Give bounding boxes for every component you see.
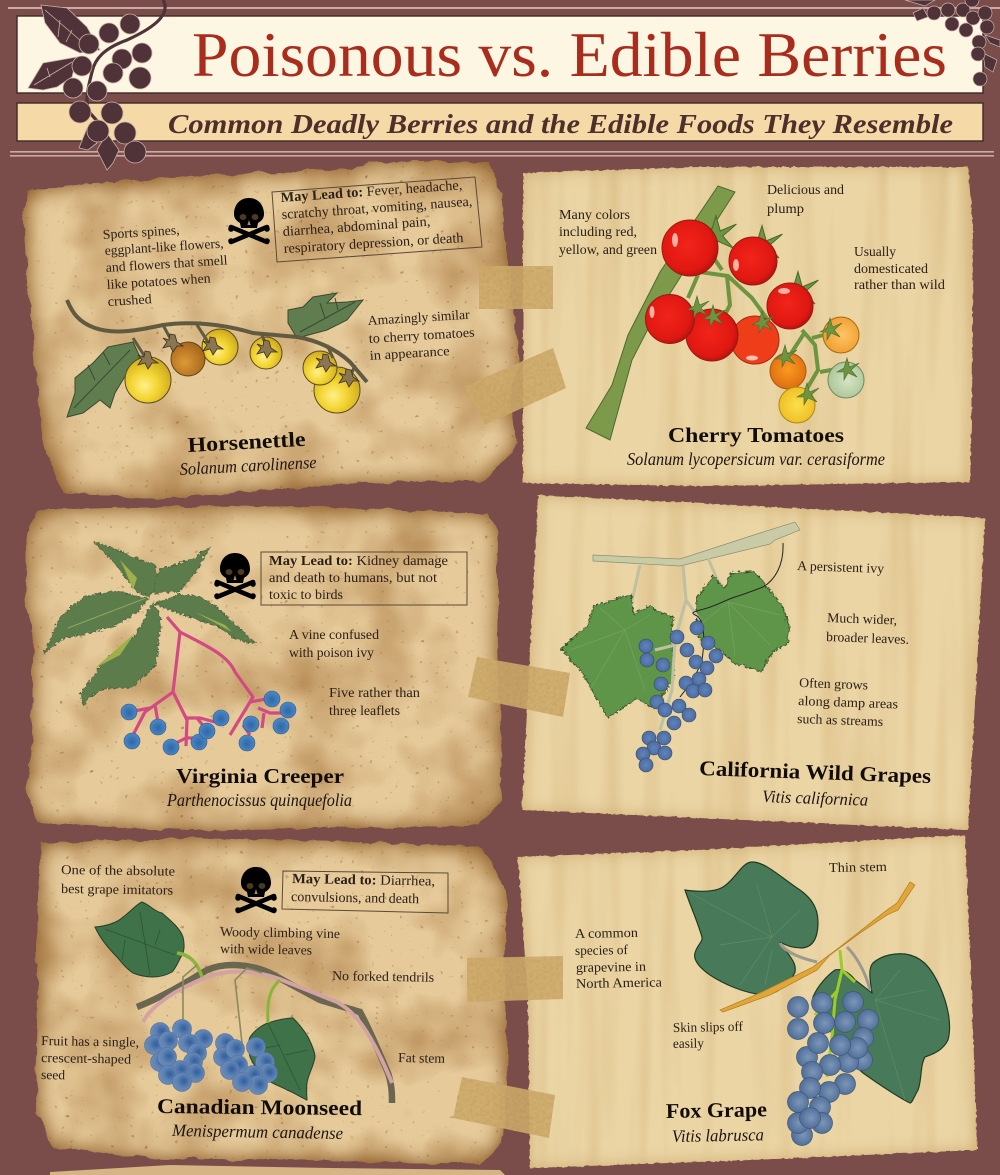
- note: colors: yellow, and green: [559, 242, 657, 257]
- note: woody vine: Woody climbing vine: [220, 924, 340, 941]
- note: delicious: Delicious and: [767, 182, 844, 197]
- name: California Wild Grapes: [699, 756, 932, 810]
- illustration: virginia creeper: [43, 541, 296, 755]
- note: damp areas: along damp areas: [798, 693, 898, 711]
- note: seed: crescent-shaped: [41, 1050, 131, 1067]
- name: Canadian Moonseed: Menispermum canadense: [171, 1120, 343, 1143]
- note: vine confused: with poison ivy: [289, 645, 374, 660]
- note: damp areas: such as streams: [797, 711, 883, 729]
- name: Fox Grape: Fox Grape: [666, 1097, 767, 1123]
- illustration: california wild grape: [560, 522, 800, 772]
- icon: berry vine top right: [905, 0, 1000, 86]
- illustration: moonseed: [95, 902, 392, 1103]
- name: Cherry Tomatoes: Cherry Tomatoes: [668, 423, 844, 447]
- name: California Wild Grapes: Vitis californica: [762, 786, 869, 810]
- next panel edge: [50, 1165, 505, 1175]
- illustration: fox grape: [685, 862, 950, 1146]
- note: domesticated: rather than wild: [854, 277, 945, 292]
- note: colors: Many colors: [559, 207, 630, 222]
- warning box: convulsions, and death: [291, 890, 419, 907]
- note: spines: crushed: [107, 291, 152, 309]
- name: Fox Grape: Vitis labrusca: [672, 1124, 764, 1146]
- panel: Cherry Tomatoes: [523, 167, 973, 486]
- warning box: scratchy throat, vomiting, nausea,: [281, 195, 473, 223]
- warning box: May Lead to: Diarrhea,: [292, 872, 435, 889]
- icon: skull and crossbones: [235, 867, 277, 913]
- note: leaves: broader leaves.: [826, 629, 909, 647]
- name: Cherry Tomatoes: [627, 423, 885, 469]
- name: Canadian Moonseed: Canadian Moonseed: [157, 1094, 363, 1120]
- note: woody vine: [220, 924, 340, 958]
- panel: Fox Grape: [518, 835, 977, 1168]
- note: ivy: A persistent ivy: [797, 558, 885, 576]
- note: spines: and flowers that smell: [105, 252, 228, 275]
- note: grape imitators: [61, 862, 175, 898]
- note: leaflets: [329, 685, 420, 718]
- note: grape imitators: best grape imitators: [61, 881, 173, 898]
- warning box: [282, 871, 448, 913]
- warning box: [261, 552, 467, 605]
- name: Cherry Tomatoes: Solanum lycopersicum var. cerasiforme: [627, 449, 885, 469]
- title banner: Poisonous vs. Edible Berries: [192, 20, 947, 90]
- note: domesticated: [854, 244, 945, 292]
- panel: Canadian Moonseed: [36, 838, 508, 1165]
- name: Canadian Moonseed: [157, 1094, 363, 1143]
- note: domesticated: domesticated: [854, 261, 928, 276]
- note: similar to tomatoes: Amazingly similar: [367, 307, 470, 328]
- header: [8, 0, 1000, 170]
- warning box: respiratory depression, or death: [283, 231, 464, 257]
- name: Virginia Creeper: Parthenocissus quinquefolia: [166, 790, 352, 810]
- name: California Wild Grapes: California Wild Grapes: [699, 756, 932, 788]
- name: Horsenettle: Horsenettle: [187, 427, 306, 457]
- icon: skull and crossbones: [214, 553, 256, 599]
- note: common species: grapevine in: [576, 959, 646, 975]
- panel: Horsenettle: [23, 162, 518, 498]
- note: leaflets: three leaflets: [329, 703, 400, 718]
- note: seed: [41, 1033, 139, 1082]
- note: leaves: [826, 610, 909, 647]
- note: skin slips: Skin slips off: [673, 1019, 744, 1035]
- illustration: horsenettle branch: [67, 293, 367, 417]
- warning box: and death to humans, but not: [269, 571, 437, 586]
- note: leaves: Much wider,: [827, 610, 897, 627]
- note: similar to tomatoes: to cherry tomatoes: [368, 325, 475, 346]
- note: seed: Fruit has a single,: [41, 1033, 139, 1050]
- subtitle banner: Common Deadly Berries and the Edible Foods They Resemble: [168, 109, 953, 139]
- note: damp areas: [797, 675, 898, 729]
- note: tendrils: No forked tendrils: [332, 968, 434, 985]
- note: common species: North America: [576, 975, 662, 991]
- note: thin stem: Thin stem: [829, 859, 888, 875]
- tape strips: [453, 266, 570, 1138]
- name: Virginia Creeper: Virginia Creeper: [176, 764, 344, 788]
- note: delicious: [767, 182, 844, 216]
- icon: berry vine top left: [28, 0, 165, 170]
- note: vine confused: A vine confused: [289, 627, 379, 642]
- note: similar to tomatoes: in appearance: [369, 343, 450, 363]
- note: colors: including red,: [559, 224, 637, 239]
- note: delicious: plump: [767, 201, 804, 216]
- note: damp areas: Often grows: [799, 675, 868, 692]
- note: spines: eggplant-like flowers,: [104, 236, 224, 258]
- note: skin slips: [673, 1019, 744, 1051]
- note: grape imitators: One of the absolute: [61, 862, 175, 879]
- panel: Virginia Creeper: [26, 506, 502, 830]
- note: common species: [575, 925, 662, 991]
- illustration: cherry tomato vine: [586, 186, 864, 440]
- note: skin slips: easily: [673, 1035, 704, 1051]
- name: Virginia Creeper: [166, 764, 352, 810]
- name: Horsenettle: Solanum carolinense: [179, 452, 317, 479]
- warning box: May Lead to: Fever, headache,: [280, 178, 463, 206]
- note: domesticated: Usually: [854, 244, 896, 259]
- subtitle banner: [17, 103, 983, 141]
- note: spines: [102, 222, 228, 309]
- name: Horsenettle: [179, 427, 317, 479]
- warning box: [272, 177, 482, 262]
- title banner: [17, 16, 983, 93]
- note: colors: [559, 207, 657, 257]
- panel: California Wild Grapes: [522, 495, 985, 830]
- note: seed: seed: [41, 1067, 65, 1082]
- note: fat stem: Fat stem: [398, 1050, 446, 1066]
- icon: skull and crossbones: [228, 198, 270, 244]
- warning box: May Lead to: Kidney damage: [269, 554, 448, 569]
- note: common species: A common: [575, 925, 638, 941]
- note: woody vine: with wide leaves: [220, 941, 312, 958]
- note: similar to tomatoes: [367, 307, 475, 363]
- warning box: toxic to birds: [269, 588, 343, 603]
- note: leaflets: Five rather than: [329, 685, 420, 700]
- note: common species: species of: [575, 942, 629, 958]
- name: Fox Grape: [666, 1097, 767, 1146]
- warning box: diarrhea, abdominal pain,: [282, 215, 431, 240]
- note: spines: Sports spines,: [102, 222, 180, 242]
- note: vine confused: [289, 627, 379, 660]
- note: spines: like potatoes when: [106, 270, 211, 292]
